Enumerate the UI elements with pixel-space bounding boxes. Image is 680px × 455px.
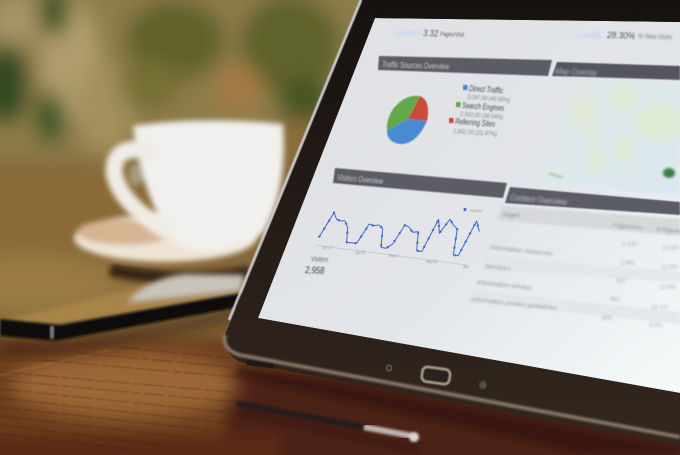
content table: 861 <box>610 297 620 303</box>
top summary statistics: % New Visits <box>638 34 672 41</box>
content table: Pageviews <box>613 223 643 232</box>
left silver rim <box>229 0 361 320</box>
content table: 10.1% <box>651 305 669 311</box>
content overview heading bar: Content Overview <box>510 192 568 207</box>
chart frame <box>297 202 480 299</box>
map overlay heading bar: Map Overlay <box>555 66 598 77</box>
top summary statistics <box>394 29 673 40</box>
visitors overview heading bar: Visitors Overview <box>337 172 384 186</box>
axis date labels: Mar <box>463 264 469 269</box>
top summary statistics: Pages/Visit <box>440 31 465 39</box>
panel: content overview <box>466 187 680 329</box>
shadow under the tablet <box>235 366 680 455</box>
content table <box>466 206 680 329</box>
top summary statistics: 3.32 <box>423 28 439 40</box>
visitors metric: 2,958 <box>304 265 325 277</box>
coffee cup and saucer <box>74 120 284 278</box>
bottom metal rim <box>225 335 680 437</box>
desk surface <box>0 338 680 455</box>
panel: map overlay <box>545 62 680 196</box>
tablet screen dashboard <box>258 18 680 393</box>
pie legend <box>449 84 510 138</box>
saucer <box>74 214 256 278</box>
pie legend: 1,642.00 (21.47%) <box>453 128 497 138</box>
back button <box>386 365 392 371</box>
top summary statistics: 28.30% <box>606 30 636 42</box>
visitors metric: Visitors <box>311 256 329 264</box>
pie legend: Referring Sites <box>455 117 495 129</box>
content table: Information resources <box>490 245 553 258</box>
home button <box>421 366 451 385</box>
tablet body <box>225 0 680 445</box>
pie legend: 3,097.00 (40.49%) <box>467 94 510 104</box>
line chart <box>315 208 479 265</box>
content table: Information privacy <box>477 280 533 292</box>
content table: 9.5% <box>649 323 663 329</box>
cup <box>114 120 284 251</box>
recent apps button <box>480 382 486 388</box>
axis date labels: May 2 <box>389 253 398 258</box>
pie legend: Search Engines <box>462 101 504 113</box>
axis date labels: Apr 29 <box>354 250 365 255</box>
pie chart <box>387 96 428 144</box>
axis date labels: Apr 15 <box>321 245 332 250</box>
pie legend: Direct Traffic <box>469 84 503 95</box>
visitors overview heading bar <box>333 168 507 198</box>
content table: 805 <box>602 316 613 322</box>
visitors metric <box>304 256 329 277</box>
traffic sources heading bar <box>378 56 552 76</box>
content overview heading bar <box>505 187 680 215</box>
bezel <box>225 0 680 445</box>
panel: traffic sources overview <box>378 56 552 144</box>
axis date labels: Visitors <box>470 208 482 213</box>
smartphone on the desk <box>0 274 245 350</box>
content table: 10.9% <box>659 285 677 291</box>
content table: Information privacy guidelines <box>471 297 557 312</box>
content table: Pages <box>503 212 521 219</box>
content table: Members <box>485 264 511 273</box>
panel: visitors overview <box>304 167 508 275</box>
tablet foot <box>246 360 274 369</box>
content table: 1,061 <box>620 261 635 267</box>
axis date labels: May 16 <box>426 259 437 264</box>
axis date labels <box>321 208 482 269</box>
pie legend: 2,910.00 (38.04%) <box>459 111 503 121</box>
world map <box>545 80 680 196</box>
stylus pen <box>239 404 419 450</box>
content table: 1,137 <box>622 242 638 248</box>
content table: 927 <box>616 279 627 285</box>
content table: 12.5% <box>661 265 679 271</box>
traffic sources heading bar: Traffic Sources Overview <box>382 59 450 71</box>
content table: 13.4% <box>662 246 680 252</box>
